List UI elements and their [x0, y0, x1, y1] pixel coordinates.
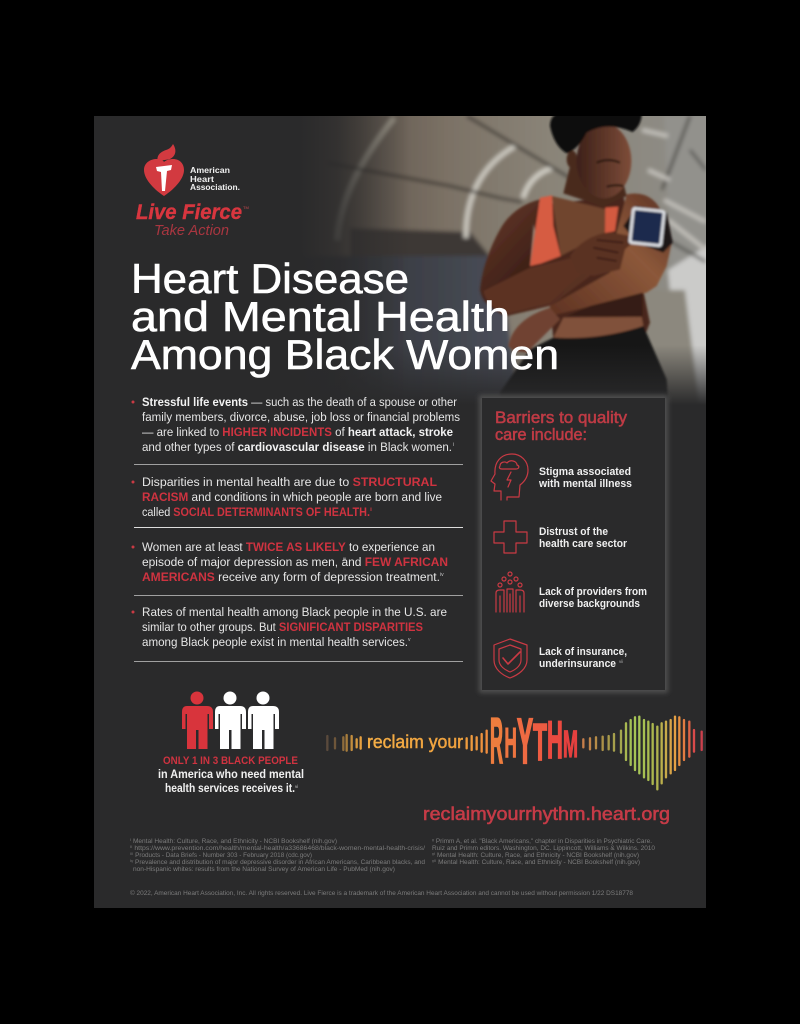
text: RHYTHM: H: [547, 710, 563, 770]
callout: 1 in 3 statistic: health services receives it.: [165, 783, 295, 795]
footnotes: right column: [431, 838, 656, 866]
bullet 4: Rates of mental health among Black people in the U.S. are: [142, 605, 447, 619]
footnotes: right column: ᵛ Primm A, et al. "Black Americans," chapter in Disparities in Psychiatric Care.: [431, 838, 652, 845]
text: RHYTHM: R: [490, 704, 503, 777]
bullet 4: v: [408, 637, 411, 643]
chest: [552, 196, 607, 256]
text: RHYTHM: [490, 704, 578, 778]
bullet 1: and other types of cardiovascular disease in Black women.: [142, 440, 452, 454]
photo: woman adjusting armband in tunnel: [331, 116, 706, 402]
text: copyright: © 2022, American Heart Association, Inc. All rights reserved. Live Fierce is a trademark of the American Heart Association and cannot be used without permission 1/22 DS18778: [130, 890, 634, 897]
heading: barriers: Barriers to quality: [495, 408, 627, 427]
text: providers: [539, 586, 647, 610]
bullet 4: among Black people exist in mental health services.: [142, 635, 408, 649]
text: Live Fierce: Live Fierce: [136, 201, 242, 224]
bullet 2: RACISM and conditions in which people are born and live: [142, 490, 442, 504]
midriff: [554, 317, 643, 338]
bullet 2: ii: [370, 507, 372, 513]
footnotes: left column: non-Hispanic whites: results from the National Survey of American Life - PubMed (nih.gov): [133, 866, 395, 873]
left sound bars: [327, 731, 621, 753]
logo: American Heart Association Live Fierce: Association.: [190, 183, 240, 192]
text: insurance: [539, 646, 627, 670]
lower hand: [508, 308, 560, 353]
bullet 2: called SOCIAL DETERMINANTS OF HEALTH.: [142, 505, 370, 519]
title: and Mental Health: [131, 293, 510, 340]
text: RHYTHM: H: [504, 719, 517, 766]
text: providers: diverse backgrounds: [539, 598, 640, 610]
left arm: [480, 199, 590, 316]
footnotes: left column: ⁱⁱⁱ Products - Data Briefs - Number 303 - February 2018 (cdc.gov): [130, 851, 312, 859]
text: stigma: with mental illness: [538, 478, 632, 490]
hand on phone: [570, 232, 631, 276]
text: Take Action: Take Action: [154, 222, 229, 239]
icon: medical cross: [494, 521, 527, 553]
bullet 1: Stressful life events — such as the death of a spouse or other: [142, 395, 457, 409]
title: Heart Disease: [131, 255, 409, 302]
leggings: [501, 326, 668, 396]
icon: head with lightning: [491, 454, 528, 500]
icon: three people, one highlighted: [182, 692, 279, 749]
text: association name: American: [190, 166, 230, 175]
icon: shield with check: [494, 639, 527, 678]
title: Among Black Women: [131, 331, 559, 378]
bullet 1: i: [453, 442, 454, 448]
bullet 2: [132, 475, 442, 519]
callout: 1 in 3 statistic: vi: [295, 784, 298, 789]
phone armband: [623, 206, 673, 253]
text: distrust: Distrust of the: [539, 526, 608, 538]
text: distrust: health care sector: [539, 538, 628, 550]
bullet 3: Women are at least TWICE AS LIKELY to experience an: [142, 540, 435, 554]
footnotes: right column: ᵛⁱ Mental Health: Culture, Race, and Ethnicity - NCBI Bookshelf (nih.gov): [431, 851, 639, 859]
right arm: [550, 194, 672, 316]
bullet 3: [132, 540, 448, 584]
text: RHYTHM: Y: [517, 706, 533, 778]
bullet 3: iii: [343, 557, 346, 563]
logo: American Heart Association Live Fierce: TM: [243, 205, 249, 210]
heading: barriers: [495, 408, 627, 444]
text: reclaim your: reclaim your: [367, 732, 463, 752]
text: website url: reclaimyourrhythm.heart.org: [423, 804, 670, 824]
bullet 1: [132, 395, 460, 454]
bullet 2: Disparities in mental health are due to STRUCTURAL: [142, 475, 438, 489]
bra band: [567, 293, 643, 316]
text: stigma: [538, 466, 632, 490]
bullet 3: iv: [440, 572, 444, 578]
logo: American Heart Association Live Fierce: Heart: [190, 175, 214, 184]
bullet 4: [132, 605, 447, 649]
text: RHYTHM: T: [533, 713, 547, 772]
torso: [530, 196, 650, 339]
footnotes: right column: Ruiz and Primm editors. Washington, DC. Lippincott, Williams & Wilkins. 2010: [432, 845, 656, 852]
logo: American Heart Association Live Fierce: [136, 144, 249, 239]
face and ear: [567, 151, 577, 168]
text: insurance: Lack of insurance,: [539, 646, 627, 658]
text: stigma: Stigma associated: [539, 466, 631, 478]
callout: 1 in 3 statistic: [158, 755, 304, 795]
panel: dark poster background: [94, 116, 706, 908]
bullet 3: episode of major depression as men, and FEW AFRICAN: [142, 555, 448, 569]
footnotes: left column: ⁱ Mental Health: Culture, Race, and Ethnicity - NCBI Bookshelf (nih.gov): [130, 837, 337, 845]
footnotes: left column: ⁱᵛ Prevalence and distribution of major depressive disorder in African Americans, Caribbean blacks, and: [130, 858, 426, 866]
bullet 4: similar to other groups. But SIGNIFICANT DISPARITIES: [142, 620, 423, 634]
text: insurance: vii: [619, 659, 623, 664]
bullet 1: family members, divorce, abuse, job loss or financial problems: [142, 410, 460, 424]
icon: heart and torch: [144, 144, 184, 196]
title: [131, 255, 559, 378]
footnotes: left column: [130, 837, 426, 873]
text: providers: Lack of providers from: [539, 586, 647, 598]
footnotes: left column: ⁱⁱ https://www.prevention.com/health/mental-health/a33686468/black-women-mental-health-crisis/: [130, 844, 425, 852]
callout: 1 in 3 statistic: ONLY 1 IN 3 BLACK PEOPLE: [163, 755, 298, 767]
neck: [562, 163, 628, 202]
text: distrust: [539, 526, 628, 550]
panel: barriers to quality care: [479, 395, 668, 693]
text block: key facts: [132, 395, 463, 662]
bullet 3: AMERICANS receive any form of depression treatment.: [142, 570, 440, 584]
logo: reclaim your rhythm sound wave: [327, 704, 702, 789]
hair: [550, 111, 642, 153]
callout: 1 in 3 statistic: in America who need mental: [158, 769, 304, 781]
heart sound bars: [626, 717, 702, 789]
bullet 1: — are linked to HIGHER INCIDENTS of heart attack, stroke: [142, 425, 453, 439]
heading: barriers: care include:: [495, 425, 587, 444]
icon: group of people: [496, 572, 524, 612]
footnotes: right column: ᵛⁱⁱ Mental Health: Culture, Race, and Ethnicity - NCBI Bookshelf (nih.gov): [431, 858, 640, 866]
text: RHYTHM: M: [563, 724, 578, 766]
text: insurance: underinsurance: [539, 658, 616, 670]
bra straps: [530, 195, 561, 268]
